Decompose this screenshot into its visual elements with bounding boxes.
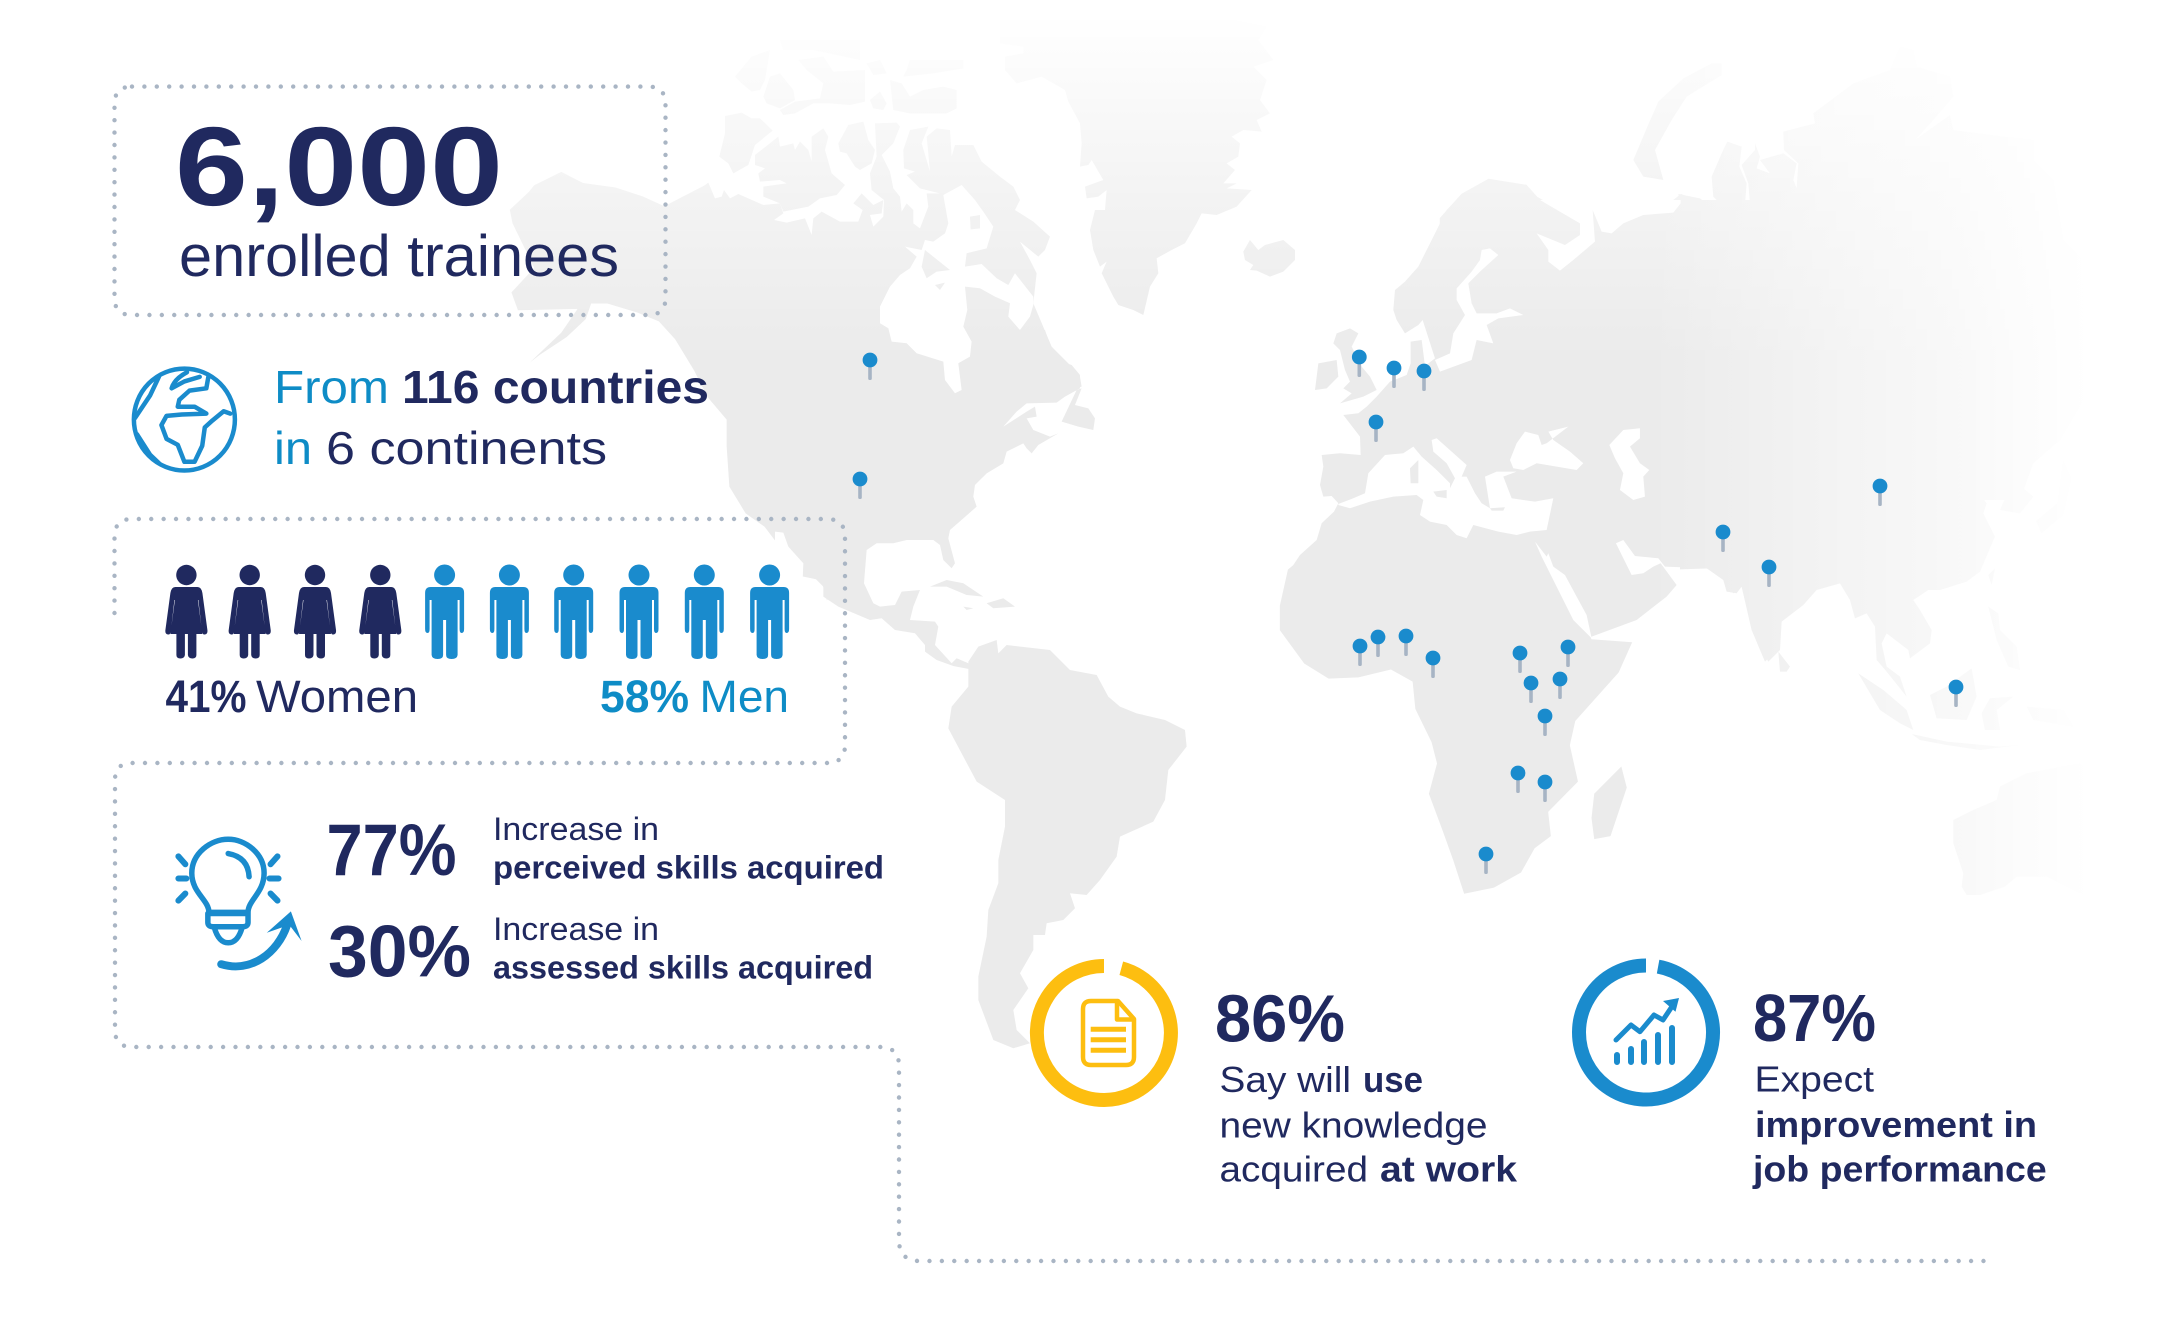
text: from countries: From xyxy=(274,361,389,413)
map: Hudson Bay xyxy=(880,185,1033,393)
icon: globe xyxy=(134,369,235,471)
pin: Canada xyxy=(863,353,877,380)
text: expect improvement: improvement in xyxy=(1755,1104,2037,1145)
label: men: Men xyxy=(700,671,789,722)
map: Caribbean islands xyxy=(930,580,1015,610)
pin: India xyxy=(1762,560,1776,587)
map: European islands xyxy=(1315,328,1505,511)
text: from countries xyxy=(274,361,709,474)
label: women xyxy=(166,671,418,722)
label: men: 58% xyxy=(600,671,689,722)
map: Alaska and west coast xyxy=(510,172,859,600)
world map xyxy=(480,0,2178,1048)
stat: 30 percent: 30% xyxy=(328,912,471,993)
stat: 77 percent: Increase in xyxy=(493,811,659,847)
pin: West Africa 1 xyxy=(1353,639,1367,666)
pin: South Africa xyxy=(1479,847,1493,874)
pin: Kenya xyxy=(1553,672,1567,699)
text: from countries: 6 continents xyxy=(326,422,607,474)
pin: Pakistan xyxy=(1716,525,1730,552)
panel: gender split xyxy=(165,564,789,722)
chart: 86 percent ring xyxy=(1037,966,1171,1100)
pin: Nigeria xyxy=(1426,651,1440,678)
stat: 86 percent: 86% xyxy=(1215,982,1345,1057)
chart: 87 percent ring xyxy=(1579,966,1713,1099)
pin: Ethiopia xyxy=(1561,640,1575,667)
dotted frame: skills and bottom connector xyxy=(115,763,1985,1261)
pin: Zambia xyxy=(1511,766,1525,793)
panel: use at work xyxy=(1037,966,1518,1190)
big number: 6,000 xyxy=(175,104,503,229)
icon: document xyxy=(1083,1001,1134,1065)
pin: Indonesia xyxy=(1949,680,1963,707)
location pins xyxy=(853,350,1963,874)
panel: skills xyxy=(178,810,884,993)
pin: Uganda xyxy=(1524,676,1538,703)
text: use knowledge xyxy=(1220,1059,1518,1190)
pin: West Africa 3 xyxy=(1399,629,1413,656)
map: eastern North America and Central America xyxy=(760,330,1095,669)
icons: men xyxy=(425,564,789,659)
map: Canada north coast xyxy=(680,40,1082,440)
text: use knowledge: new knowledge xyxy=(1220,1105,1488,1146)
map: Newfoundland xyxy=(1062,388,1095,430)
label: men xyxy=(600,671,789,722)
pin: Germany xyxy=(1417,364,1431,391)
label: women: Women xyxy=(256,671,418,722)
text: use knowledge: use xyxy=(1363,1059,1423,1100)
stat: 77 percent: perceived skills acquired xyxy=(493,850,884,886)
pin: China xyxy=(1873,479,1887,506)
map: top fade xyxy=(480,0,2178,360)
stat: 87 percent: 87% xyxy=(1753,981,1876,1056)
dotted frame: gender xyxy=(114,519,845,763)
map: Greenland and Iceland xyxy=(1000,20,1295,315)
map: Madagascar xyxy=(1592,766,1627,839)
pin: Tanzania xyxy=(1538,709,1552,736)
dotted frame: trainees xyxy=(114,87,666,315)
map: Europe and Middle East xyxy=(1290,200,1790,662)
pin: West Africa 2 xyxy=(1371,630,1385,657)
pin: USA xyxy=(853,472,867,499)
pin: Sudan xyxy=(1513,646,1527,673)
map: Australia xyxy=(1953,763,2100,903)
map: Japan xyxy=(2036,460,2071,533)
map: South and East Asia xyxy=(1680,480,2100,903)
icon: growth chart xyxy=(1616,998,1679,1062)
panel: job performance xyxy=(1579,966,2047,1190)
stat: 30 percent: assessed skills acquired xyxy=(493,950,873,986)
stat: 30 percent xyxy=(328,911,873,993)
map: Gulf of California xyxy=(775,532,803,580)
text: from countries: 116 countries xyxy=(402,361,709,413)
label: women: 41% xyxy=(166,671,246,722)
panel: countries xyxy=(134,361,709,474)
stat: 77 percent: 77% xyxy=(326,810,456,891)
text: expect improvement: job performance xyxy=(1752,1149,2047,1190)
text: expect improvement xyxy=(1752,1059,2047,1190)
map: seas xyxy=(1338,200,1681,638)
icon: light bulb with arrow xyxy=(178,839,302,966)
map: Africa xyxy=(1280,545,1632,894)
text: use knowledge: at work xyxy=(1380,1149,1518,1190)
pin: United Kingdom xyxy=(1352,350,1367,377)
pin: France xyxy=(1369,415,1383,442)
subheading: enrolled trainees xyxy=(179,224,619,289)
icons: women xyxy=(165,565,401,658)
text: use knowledge: acquired xyxy=(1220,1149,1368,1190)
map: Asian islands xyxy=(1778,480,2073,750)
text: use knowledge: Say will xyxy=(1220,1059,1351,1100)
map: Siberia xyxy=(1600,47,2100,500)
stat: 30 percent: Increase in xyxy=(493,911,659,947)
map: northern Scandinavia and Russia xyxy=(1280,179,2071,894)
pin: Malawi xyxy=(1538,775,1552,802)
map: Canadian Arctic islands xyxy=(719,40,963,212)
map: right fade xyxy=(1650,0,2178,1000)
text: expect improvement: Expect xyxy=(1754,1059,1874,1100)
map: South America xyxy=(948,640,1187,1048)
text: from countries: in xyxy=(274,422,312,474)
pin: Netherlands xyxy=(1387,361,1401,388)
panel: enrolled trainees xyxy=(175,104,619,289)
map: Novaya Zemlya xyxy=(1633,63,1722,180)
stat: 77 percent xyxy=(326,810,884,891)
